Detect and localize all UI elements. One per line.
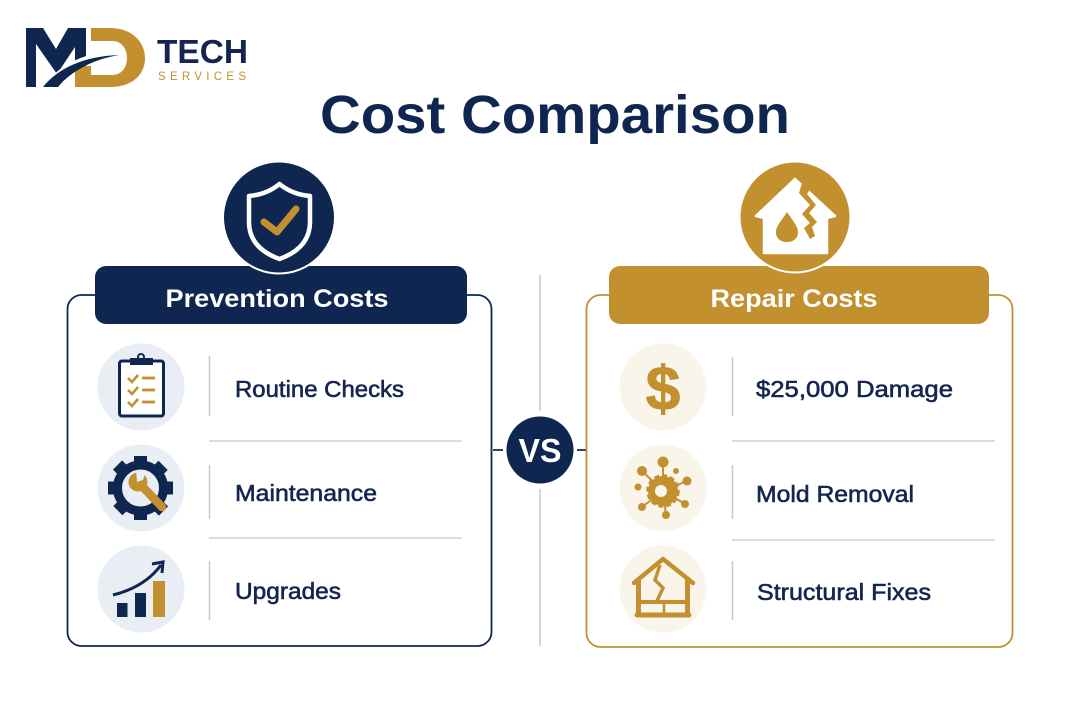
label: $25,000 Damage xyxy=(756,376,953,402)
heading bar: Repair Costs xyxy=(710,285,878,313)
logo: MD Tech Services xyxy=(26,28,248,87)
heading bar: Prevention Costs xyxy=(166,285,388,313)
icon: mold spores xyxy=(620,444,706,532)
heading bar xyxy=(95,266,467,324)
center divider and VS badge xyxy=(493,275,586,646)
heading bar xyxy=(609,266,989,324)
label: Routine Checks xyxy=(235,376,404,402)
label: Mold Removal xyxy=(756,481,914,507)
icon: cracked house xyxy=(620,546,706,632)
panel outline xyxy=(586,295,1012,647)
label: Maintenance xyxy=(235,480,377,506)
icon: dollar sign xyxy=(620,344,706,430)
row dividers xyxy=(732,357,995,620)
icon: shield xyxy=(223,162,335,274)
logo: MD Tech Services: SERVICES xyxy=(158,71,248,83)
label: Structural Fixes xyxy=(757,579,931,605)
title: Cost Comparison xyxy=(320,85,790,145)
label: Upgrades xyxy=(235,578,341,604)
icon: growth chart xyxy=(98,546,184,632)
row dividers xyxy=(209,356,462,620)
icon: clipboard checklist xyxy=(98,344,184,430)
logo: MD Tech Services: TECH xyxy=(157,33,248,70)
panel: repair costs xyxy=(586,162,1012,647)
icon: dollar sign: $ xyxy=(646,355,680,424)
panel: prevention costs xyxy=(68,162,492,646)
panel outline xyxy=(68,295,492,646)
icon: damaged house xyxy=(740,162,850,272)
icon: gear and wrench xyxy=(95,442,186,534)
center divider and VS badge: VS xyxy=(518,432,562,469)
